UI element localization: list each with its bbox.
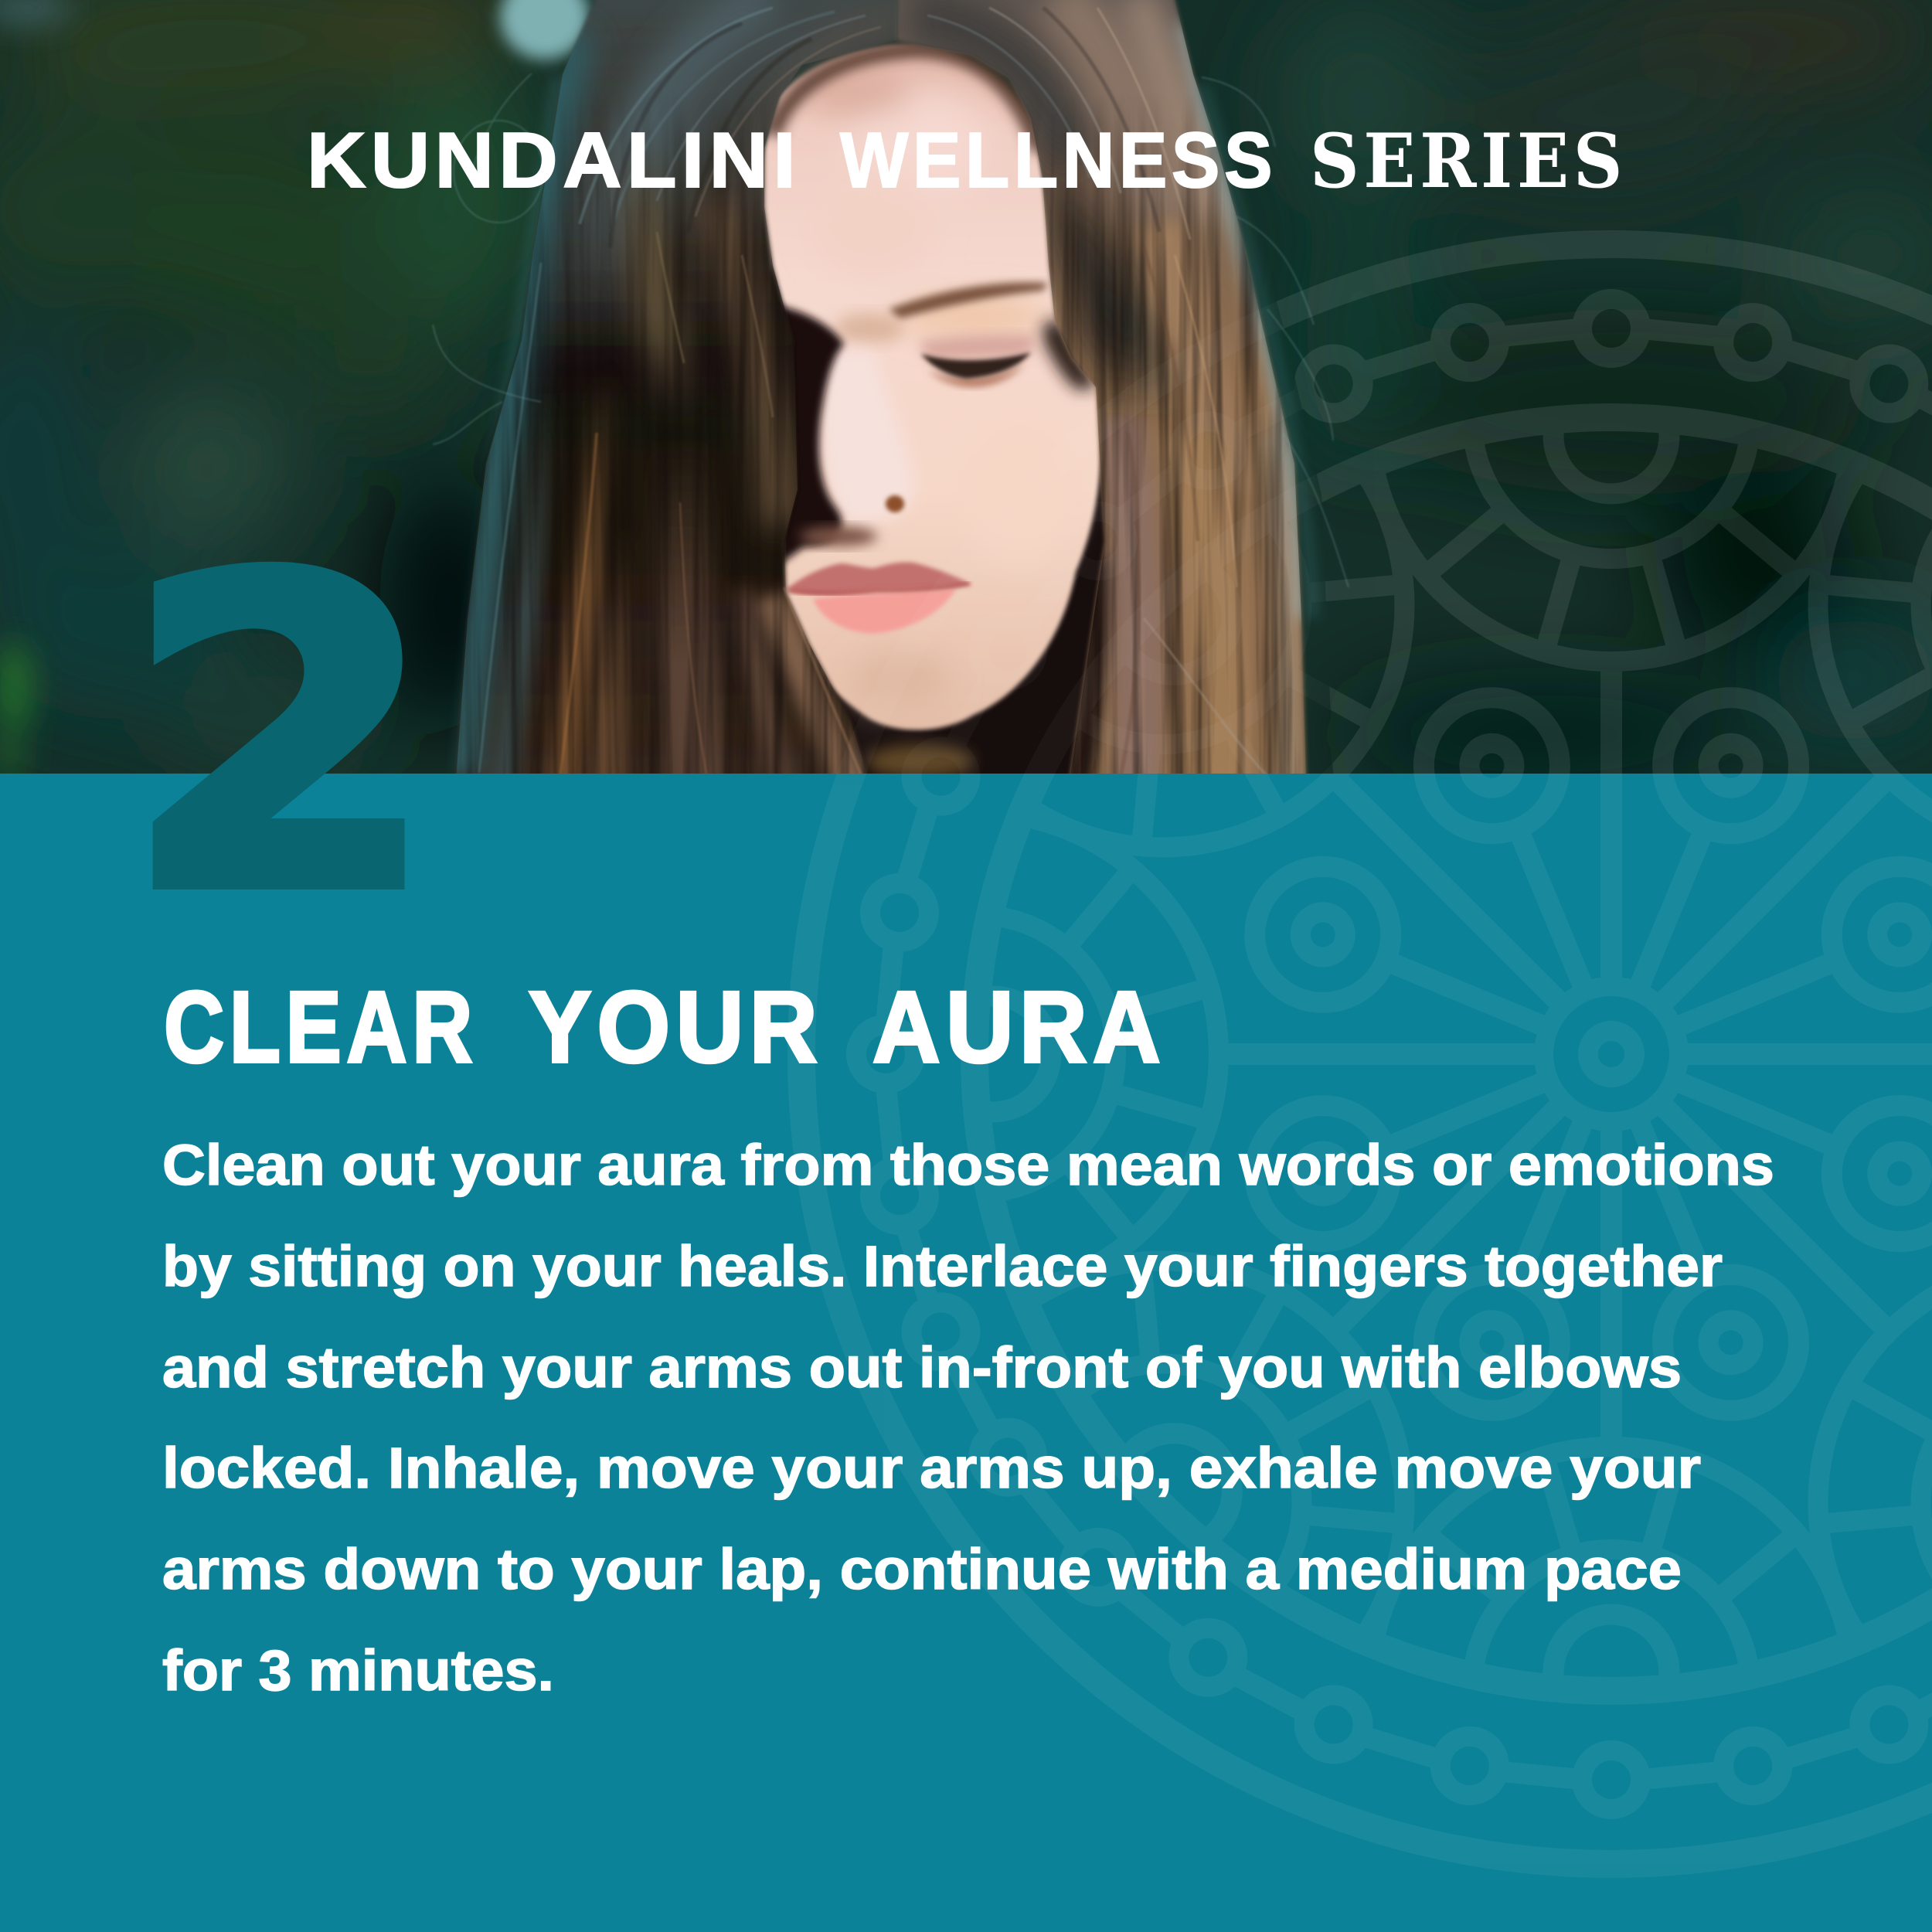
body line 5: arms down to your lap, continue with a medium pace [162,1537,1682,1601]
body line 3: and stretch your arms out in-front of you with elbows [162,1335,1682,1400]
title: SERIES: SERIES [1310,117,1627,205]
large step number 2: 2 [124,489,437,984]
photo: eye and lashes [921,352,1031,379]
mandala watermark over photo background [735,178,1932,1930]
photo: warm shadow by eyebrow [835,313,904,344]
series title [307,117,1627,205]
photo: nostril [886,495,904,512]
heading word: YOUR: YOUR [529,970,823,1083]
photo: upper lip [787,562,970,594]
title: KUNDALINI: KUNDALINI [307,117,801,204]
heading word: AURA: AURA [872,970,1166,1083]
body paragraph [162,1133,1774,1702]
heading word: CLEAR: CLEAR [164,970,478,1083]
body line 1: Clean out your aura from those mean words or emotions [162,1133,1774,1197]
photo: eyelid [920,335,1036,360]
photo: stray hairs [433,73,1349,587]
photo: bokeh highlight [500,0,590,60]
photo: cast shadow beside nose [781,300,849,566]
photo: woman looking down against blurred forest [0,0,1932,788]
body line 4: locked. Inhale, move your arms up, exhale move your [162,1436,1701,1500]
photo: under-nose shadow [800,526,877,546]
title: WELLNESS: WELLNESS [840,117,1277,204]
photo: face [756,45,1101,778]
body line 2: by sitting on your heals. Interlace your fingers together [162,1234,1723,1298]
mandala watermark on teal panel [735,178,1932,1930]
heading [164,970,1166,1083]
photo: neck golden light [866,744,974,778]
photo: dark hair behind the face [835,465,1105,774]
photo: teal hair fringe [461,77,1314,773]
photo: lower lid [927,363,1025,386]
photo: lip parting line [788,583,970,594]
photo: right hair [896,0,1329,788]
mandala watermark faint over hair [735,178,1932,1930]
photo background: blurred greenery [0,0,1932,788]
photo: lower lip [813,589,957,634]
photo: forehead and cheek tones [804,71,1074,708]
photo: eyebrow [889,282,1048,318]
photo: left hair [433,0,904,788]
photo: lit nose [821,349,915,524]
photo: left hair fine strands [479,8,881,777]
photo: dark shadow between eye and hair [1043,318,1097,390]
photo: hairline shadow on forehead [773,49,1039,151]
body line 6: for 3 minutes. [162,1638,554,1702]
photo: right hair fine strands [927,8,1267,777]
